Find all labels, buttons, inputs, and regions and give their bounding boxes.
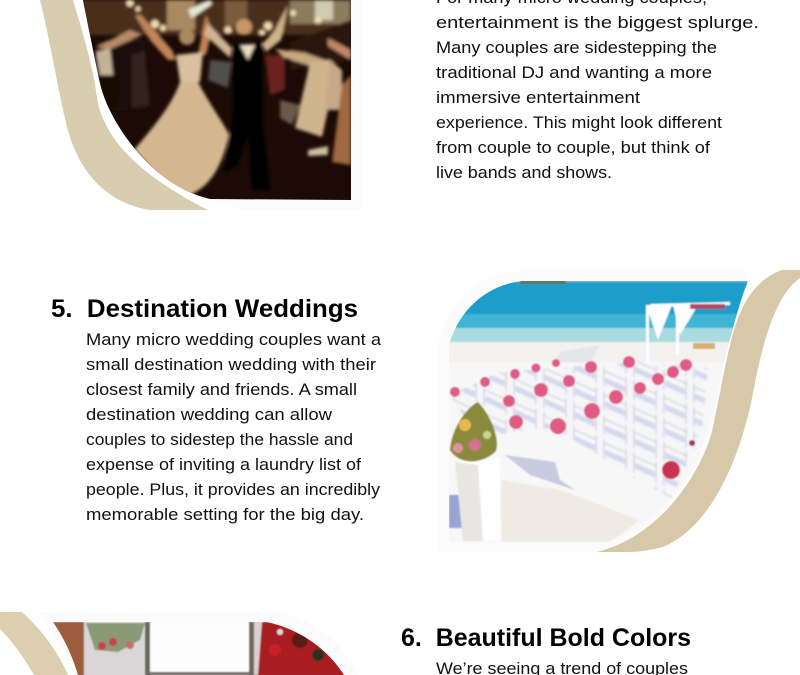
paragraph: entertainment <box>436 0 759 182</box>
beige swoosh: top photo <box>40 0 208 210</box>
photo halo: bold colors section <box>40 612 358 675</box>
paragraph: entertainment: immersive entertainment <box>436 88 640 107</box>
beige swoosh: beach photo <box>597 270 800 552</box>
paragraph: destination weddings: people. Plus, it provides an incredibly <box>86 480 381 499</box>
paragraph: entertainment: Many couples are sidestepping the <box>436 38 717 57</box>
photo: beach wedding ceremony <box>445 278 755 548</box>
paragraph: entertainment: entertainment is the biggest splurge. <box>436 13 759 32</box>
photo: wedding couple with sparklers <box>80 0 355 200</box>
paragraph: destination weddings: closest family and friends. A small <box>86 380 357 399</box>
beige swoosh: bold colors photo <box>0 612 68 675</box>
paragraph: destination weddings: small destination wedding with their <box>86 355 376 374</box>
paragraph: destination weddings <box>86 330 382 524</box>
paragraph: destination weddings: Many micro wedding couples want a <box>86 330 382 349</box>
photo: red floral window <box>50 620 350 675</box>
heading: beautiful bold colors: 6. Beautiful Bold Colors <box>401 624 691 652</box>
paragraph: destination weddings: destination wedding can allow <box>86 405 333 424</box>
paragraph: entertainment: traditional DJ and wanting a more <box>436 63 712 82</box>
paragraph: destination weddings: couples to sidestep the hassle and <box>86 430 353 449</box>
heading: destination weddings: 5. Destination Weddings <box>51 295 358 323</box>
paragraph: entertainment: experience. This might look different <box>436 113 722 132</box>
photo halo: beach section <box>439 271 750 552</box>
paragraph: entertainment: from couple to couple, but think of <box>436 138 710 157</box>
photo halo: top section <box>120 0 361 210</box>
paragraph: destination weddings: expense of inviting a laundry list of <box>86 455 361 474</box>
paragraph: entertainment: live bands and shows. <box>436 163 612 182</box>
white band: top photo <box>73 0 240 210</box>
paragraph: destination weddings: memorable setting for the big day. <box>86 505 364 524</box>
